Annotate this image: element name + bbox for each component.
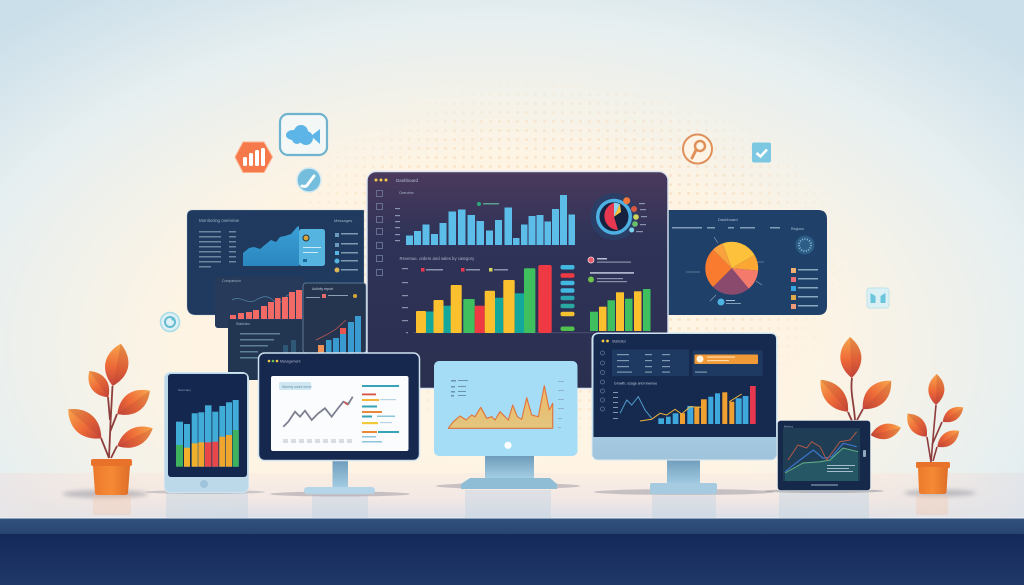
side list <box>334 218 358 272</box>
tablet home bar <box>811 484 838 486</box>
pie sidebar <box>791 227 818 309</box>
device: small tablet <box>764 420 884 493</box>
alert card <box>692 350 762 376</box>
device: light blue monitor with area chart <box>434 361 580 489</box>
chart heading: Growth, usage and revenue <box>614 382 657 386</box>
pie chart <box>705 242 758 295</box>
window title: Dashboard <box>396 178 419 183</box>
right axis <box>558 381 564 428</box>
donut chart <box>590 193 647 240</box>
mini bar chart <box>590 289 650 331</box>
icon: cloud camera <box>280 114 327 155</box>
trend lines <box>620 394 742 421</box>
icon: small chart tile <box>867 288 889 308</box>
top bar chart <box>399 191 575 245</box>
pie callout <box>718 298 741 306</box>
metric table <box>199 231 236 268</box>
lower chart heading: Revenue, orders and sales by category <box>400 256 475 261</box>
ranked bars <box>362 385 399 442</box>
panel: red bar chart <box>215 277 305 328</box>
axis labels <box>395 208 400 241</box>
tablet multi-line chart <box>785 432 858 481</box>
icon: target ring <box>160 312 180 332</box>
tablet label: Metrics <box>784 424 794 428</box>
icon: check badge <box>297 168 321 192</box>
tablet label: Summary <box>178 388 191 392</box>
device reflections <box>166 490 869 518</box>
window controls <box>602 340 609 342</box>
panel: lower left table: Statistics <box>236 322 250 326</box>
white chart card: Weekly sales trend <box>282 385 312 389</box>
panel title: Dashboard <box>718 217 738 222</box>
info card <box>299 229 325 266</box>
plant: left <box>61 342 157 515</box>
icon: check square <box>752 142 771 162</box>
combo bars <box>658 386 756 424</box>
icon: orange key ring <box>683 134 712 164</box>
device: monitor with line chart <box>258 353 420 496</box>
desk <box>0 473 1024 585</box>
lower axis <box>402 268 594 333</box>
tablet button <box>863 450 866 457</box>
line chart <box>283 397 353 427</box>
lower bar chart <box>416 265 552 333</box>
area chart <box>243 226 299 266</box>
lower chart legend <box>421 268 508 272</box>
chart legend <box>451 380 468 396</box>
device: large monitor with combo chart <box>592 333 777 495</box>
data table <box>612 350 689 376</box>
chart axis <box>613 392 618 419</box>
icon: orange bar hexagon <box>235 142 272 172</box>
tablet note <box>827 465 855 472</box>
panel: left dashboard <box>187 210 364 315</box>
top bar chart: Overview <box>399 191 414 195</box>
status pills <box>560 265 574 331</box>
side list: Messages <box>334 218 352 223</box>
pie labels <box>686 237 764 301</box>
device: tablet <box>145 372 265 494</box>
panel: red bar chart: Comparison <box>222 279 241 283</box>
plant: right large <box>813 337 903 442</box>
panel: lower left table <box>228 320 305 380</box>
plant: right small <box>902 374 976 515</box>
panel: blue bar chart: Activity report <box>312 287 333 291</box>
window controls <box>268 360 278 362</box>
nav rail <box>376 190 382 276</box>
monitor title: Statistics <box>612 340 626 344</box>
pie sidebar: Regions <box>791 227 804 231</box>
side note rows <box>588 257 634 282</box>
tablet stacked bars <box>176 400 239 467</box>
power dot <box>504 442 512 449</box>
panel: right pie dashboard <box>660 210 827 315</box>
panel title: Monitoring overview <box>199 218 240 223</box>
filter strip <box>672 227 780 228</box>
monitor title: Management <box>280 360 300 364</box>
side rail <box>600 351 604 411</box>
panel: central dashboard <box>367 172 668 388</box>
window controls <box>374 178 388 182</box>
area chart <box>448 386 553 428</box>
white chart card <box>271 376 408 451</box>
chart legend badge <box>477 202 499 206</box>
panel: blue bar chart <box>303 283 366 353</box>
